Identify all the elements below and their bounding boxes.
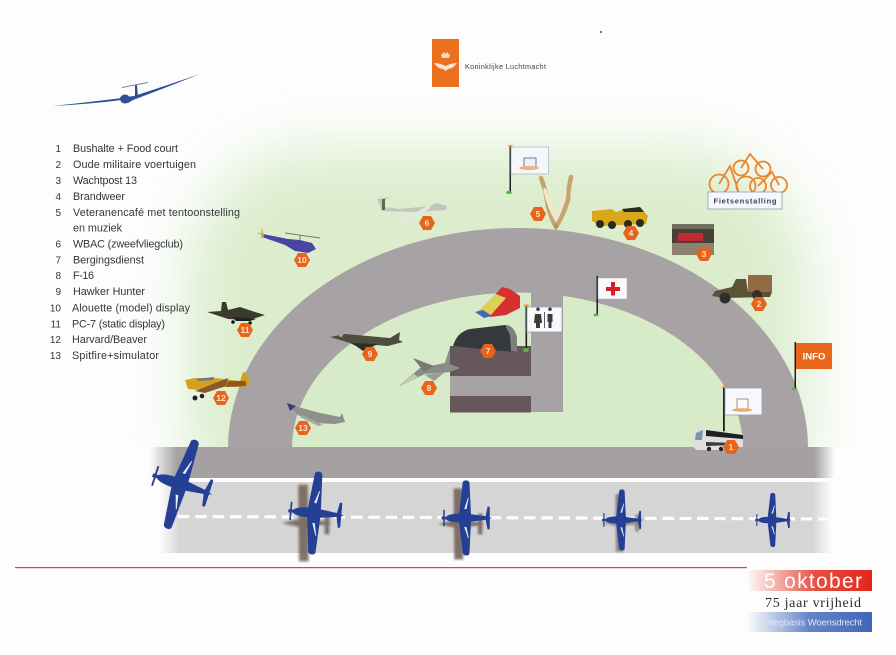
logo: Koninklijke Luchtmacht xyxy=(432,39,546,87)
badge 7 xyxy=(480,344,496,358)
flag: cafe south xyxy=(722,386,762,432)
legend list: 2 xyxy=(55,160,61,171)
legend list xyxy=(50,143,240,362)
legend list: PC-7 (static display) xyxy=(72,318,165,330)
legend list: 7 xyxy=(55,256,61,266)
legend list: 1 xyxy=(55,144,61,155)
badge 13: 13 xyxy=(298,423,308,433)
legend list: Bushalte + Food court xyxy=(73,143,178,155)
legend list: 5 xyxy=(55,208,61,219)
badge 2: 2 xyxy=(757,299,762,309)
green infield inside arch xyxy=(292,293,743,448)
label: Fietsenstalling: Fietsenstalling xyxy=(714,196,777,206)
badge 3: 3 xyxy=(702,249,707,259)
legend list: Brandweer xyxy=(73,191,125,203)
badge 6: 6 xyxy=(425,218,430,228)
badge 11 xyxy=(237,323,253,337)
badge 6 xyxy=(419,216,435,230)
legend list: 3 xyxy=(55,176,61,187)
badge 3 xyxy=(696,247,712,261)
apron dark parking strip lower xyxy=(450,396,531,412)
panel: runway xyxy=(150,447,835,553)
icon: fire truck xyxy=(592,207,648,229)
icon: bus xyxy=(693,428,743,451)
subtitle: 75 jaar vrijheid: 75 jaar vrijheid xyxy=(765,596,861,611)
badge 4 xyxy=(623,226,639,240)
badge 5: 5 xyxy=(536,209,541,219)
panel: taxi road arch xyxy=(228,228,808,448)
legend list: Spitfire+simulator xyxy=(72,350,159,362)
icon: recovery hangar xyxy=(453,325,517,352)
icon: Alouette helicopter xyxy=(258,227,320,253)
legend list: 6 xyxy=(55,240,61,250)
icon: blue plane 4 with shadow xyxy=(602,489,643,552)
badge 10 xyxy=(294,253,310,267)
icon: blue plane 2 with shadow xyxy=(281,469,347,561)
icon: guard post photo xyxy=(672,224,714,255)
legend list: Bergingsdienst xyxy=(73,254,144,266)
badge 2 xyxy=(751,297,767,311)
red divider line xyxy=(15,567,747,568)
badge 7: 7 xyxy=(486,346,491,356)
icon: WBAC glider xyxy=(377,197,447,224)
number badges xyxy=(213,207,767,454)
badge 10: 10 xyxy=(297,255,307,265)
label: Fietsenstalling xyxy=(708,192,782,209)
location banner: vliegbasis Woensdrecht xyxy=(747,612,872,632)
icon: Hawker Hunter xyxy=(330,332,403,351)
logo: Koninklijke Luchtmacht: Koninklijke Luchtmacht xyxy=(465,62,546,71)
legend list: 4 xyxy=(55,192,61,203)
date banner: 5 oktober: 5 oktober xyxy=(764,570,862,593)
service column and apron xyxy=(450,290,563,412)
badge 9 xyxy=(362,347,378,361)
legend list: F-16 xyxy=(73,270,94,282)
flag: first aid xyxy=(594,276,627,316)
legend list: 10 xyxy=(50,304,61,314)
icon: bouncy castle slide xyxy=(475,287,520,318)
apron dark parking strip xyxy=(450,346,531,376)
legend list: 9 xyxy=(55,287,61,298)
badge 13 xyxy=(295,421,311,435)
badge 11: 11 xyxy=(240,325,250,335)
badge 9: 9 xyxy=(368,349,373,359)
badge 12 xyxy=(213,391,229,405)
icon: Harvard xyxy=(185,372,250,400)
badge 8: 8 xyxy=(427,383,432,393)
legend list: Wachtpost 13 xyxy=(73,175,137,187)
flag: toilets xyxy=(523,304,562,352)
legend list: Harvard/Beaver xyxy=(72,334,147,346)
legend list: 13 xyxy=(50,351,61,362)
legend list: Veteranencafé met tentoonstelling xyxy=(73,207,240,219)
icon: blue plane 1 xyxy=(138,431,226,539)
icon: F-16 xyxy=(399,347,460,386)
flag: cafe north xyxy=(506,145,548,194)
legend list: Alouette (model) display xyxy=(72,302,191,314)
legend list: 8 xyxy=(55,271,61,282)
legend list: Hawker Hunter xyxy=(73,286,145,298)
badge 5 xyxy=(530,207,546,221)
legend list: 12 xyxy=(50,335,61,346)
flag: INFO: INFO xyxy=(803,352,825,362)
green airfield background xyxy=(163,124,833,447)
icon: Spitfire xyxy=(287,403,345,426)
badge 1: 1 xyxy=(729,442,734,452)
legend list: en muziek xyxy=(73,222,123,234)
icon: PC-7 xyxy=(207,302,265,325)
badge 8 xyxy=(421,381,437,395)
icon: blue plane 3 with shadow xyxy=(438,480,492,560)
icon: old army truck xyxy=(712,275,772,304)
icon: blue plane 5 xyxy=(755,493,791,547)
legend list: 11 xyxy=(51,320,61,330)
icon: speck on the paper xyxy=(600,31,602,33)
badge 4: 4 xyxy=(629,228,634,238)
legend list: Oude militaire voertuigen xyxy=(73,159,196,171)
flag: INFO xyxy=(792,342,832,390)
icon: bicycle parking xyxy=(710,154,787,196)
location banner: vliegbasis Woensdrecht: vliegbasis Woensdrecht xyxy=(765,618,862,628)
badge 12: 12 xyxy=(216,393,226,403)
icon: veterans emblem xyxy=(541,177,571,228)
badge 1 xyxy=(723,440,739,454)
icon: blue glider xyxy=(53,74,200,106)
legend list: WBAC (zweefvliegclub) xyxy=(73,238,183,250)
